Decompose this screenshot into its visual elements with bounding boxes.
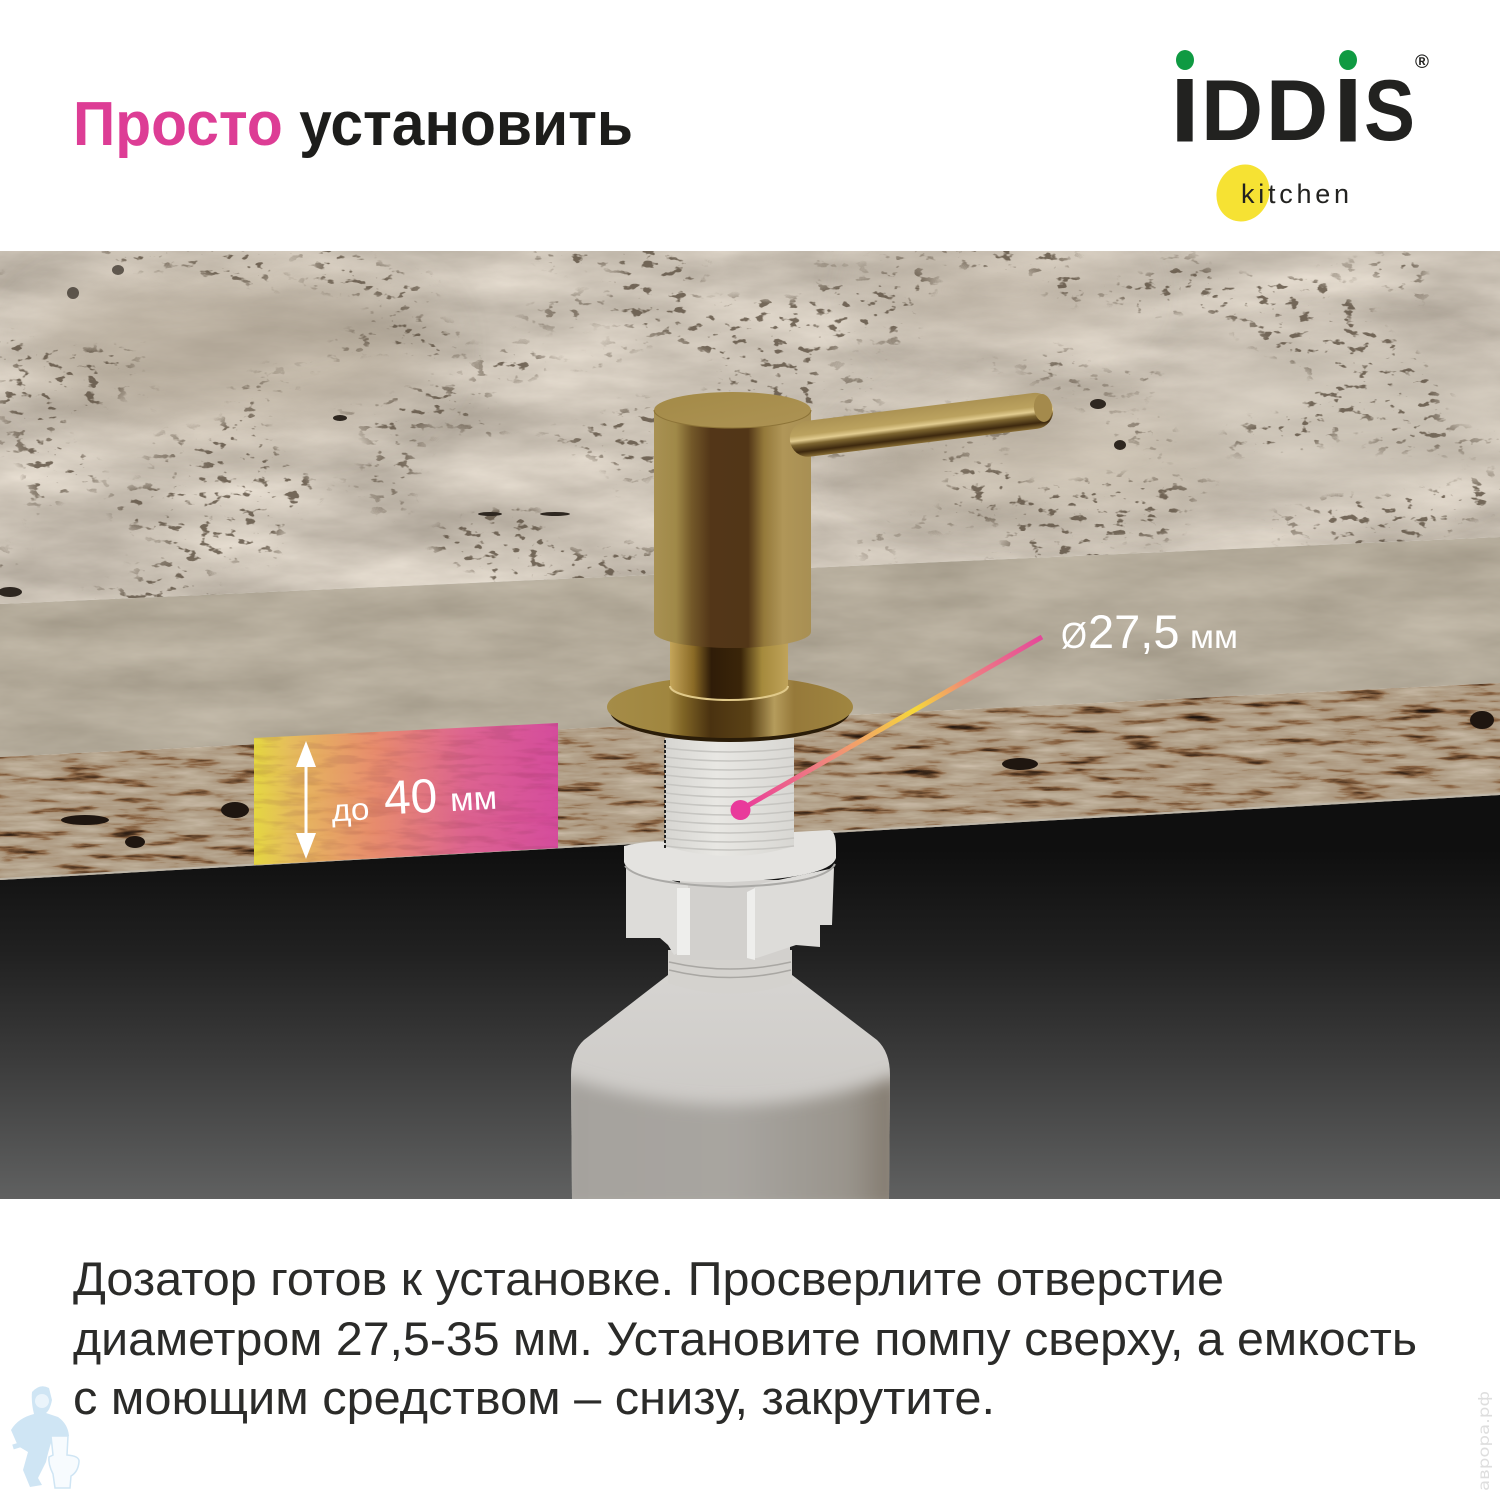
brass flange — [607, 676, 853, 742]
logo wordmark: D — [1266, 63, 1328, 159]
diameter label: 27,5 — [1088, 605, 1179, 658]
plumber head — [35, 1394, 49, 1408]
band label: до — [331, 791, 370, 828]
band label — [330, 767, 498, 828]
stem cylinder — [665, 738, 794, 856]
dispenser bottle — [571, 950, 890, 1199]
photo panel: installation scene — [0, 250, 1500, 1210]
pump cylinder — [654, 410, 811, 648]
logo wordmark: I — [1173, 63, 1197, 159]
countertop surface — [0, 530, 1500, 762]
diameter label: мм — [1190, 618, 1238, 655]
double arrow — [296, 741, 316, 859]
description line 2: диаметром 27,5-35 мм. Установите помпу сверху, а емкость — [73, 1312, 1417, 1365]
spout arm — [788, 391, 1055, 459]
brass pump spout — [788, 391, 1055, 459]
band label: мм — [449, 779, 498, 818]
plumber figure — [11, 1386, 69, 1487]
stone wall — [0, 250, 1500, 611]
logo kitchen word: kitchen — [1241, 179, 1349, 209]
description line 1: Дозатор готов к установке. Просверлите отверстие — [73, 1252, 1224, 1305]
diameter label — [1061, 605, 1238, 658]
countertop front edge — [0, 680, 1500, 884]
nut ribs — [677, 888, 755, 960]
nut wings — [626, 868, 834, 958]
callout: thickness band up to 40 mm — [254, 720, 558, 868]
callout: hole diameter 27.5 mm — [730, 605, 1238, 820]
diameter label: Ø — [1061, 615, 1087, 656]
leader dot — [730, 800, 750, 820]
pump top cap — [654, 392, 811, 428]
nut hub — [680, 880, 790, 960]
band texture — [254, 720, 558, 868]
band label: 40 — [383, 770, 439, 826]
logo wordmark: D — [1201, 63, 1263, 159]
flange shadow rim — [610, 680, 850, 742]
toilet — [49, 1436, 79, 1488]
brass pump body — [654, 392, 811, 648]
logo wordmark: I — [1336, 63, 1360, 159]
bottle lower shade — [560, 1075, 900, 1210]
nut top ring — [624, 830, 836, 882]
logo yellow blob — [1207, 156, 1279, 230]
brass neck — [670, 640, 788, 700]
flange plate — [607, 676, 853, 738]
watermark text: аврора.рф — [1475, 1391, 1493, 1491]
band fill — [254, 723, 558, 865]
bottle neck — [668, 950, 792, 994]
threaded stem — [665, 738, 794, 856]
title: Просто установить — [73, 90, 633, 159]
dark cabinet interior — [0, 795, 1500, 1199]
bottle body — [571, 975, 890, 1199]
watermark icon: plumber with toilet — [11, 1386, 79, 1488]
description line 3: с моющим средством – снизу, закрутите. — [73, 1371, 995, 1424]
logo registered mark: ® — [1415, 52, 1429, 73]
logo: IDDIS kitchen — [1173, 50, 1429, 230]
white mounting nut — [624, 830, 836, 960]
description text — [73, 1252, 1417, 1424]
logo wordmark: S — [1364, 63, 1415, 159]
logo wordmark — [1173, 63, 1415, 159]
leader line — [740, 637, 1042, 810]
counter bottom highlight — [0, 794, 1500, 879]
logo green dots — [1176, 50, 1357, 70]
spout tip — [1032, 393, 1054, 423]
plumber wrench — [13, 1438, 42, 1447]
